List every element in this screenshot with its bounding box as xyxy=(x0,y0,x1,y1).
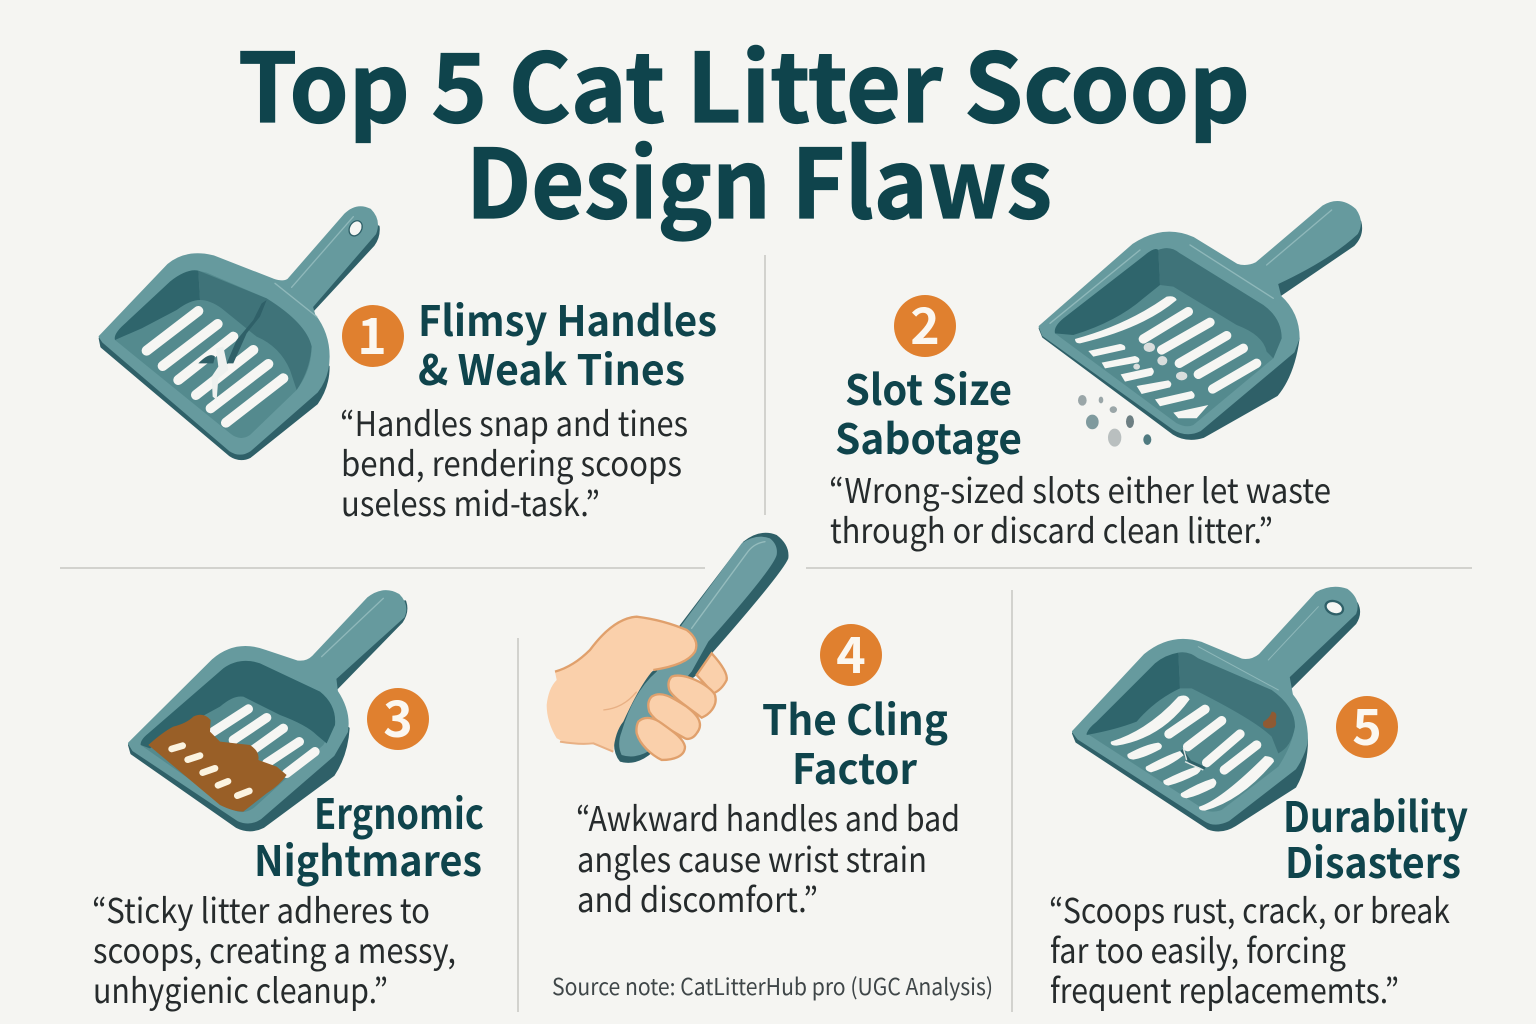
heading: Factor xyxy=(792,736,918,797)
heading: & Weak Tines xyxy=(418,337,685,398)
heading: Durability xyxy=(1283,784,1468,845)
icon: hand gripping scoop handle xyxy=(547,533,788,763)
quote: through or discard clean litter.” xyxy=(830,504,1273,553)
icon: cracked rusty scoop xyxy=(1073,588,1359,830)
badge 3: 3 xyxy=(383,680,413,752)
icon: scoop with stuck litter xyxy=(129,592,406,830)
badge 1: 1 xyxy=(357,297,387,369)
quote: “Sticky litter adheres to xyxy=(92,884,430,933)
heading: Flimsy Handles xyxy=(418,288,717,349)
badge 3 xyxy=(367,680,429,752)
heading xyxy=(835,357,1022,467)
quote: bend, rendering scoops xyxy=(341,437,682,486)
badge 4 xyxy=(820,616,882,688)
icon: scoop with litter falling through slots xyxy=(1040,202,1361,447)
quote: “Scoops rust, crack, or break xyxy=(1049,884,1450,933)
heading xyxy=(762,687,948,797)
title: Top 5 Cat Litter Scoop xyxy=(238,13,1250,150)
icon: scoop with cracked handle xyxy=(100,208,378,459)
quote xyxy=(340,397,688,526)
heading: Slot Size xyxy=(845,357,1012,418)
badge 5: 5 xyxy=(1352,688,1382,760)
heading: Ergnomic xyxy=(314,781,484,842)
quote: scoops, creating a messy, xyxy=(93,924,456,973)
heading xyxy=(418,288,717,398)
quote xyxy=(829,464,1331,553)
panel: flaw 3 ergonomic nightmares xyxy=(92,592,484,1013)
panel: flaw 2 slot size xyxy=(829,202,1361,553)
heading: The Cling xyxy=(762,687,948,748)
quote: angles cause wrist strain xyxy=(577,833,927,882)
heading: Nightmares xyxy=(254,828,482,889)
panel: flaw 4 the cling factor xyxy=(547,533,993,1002)
quote: “Awkward handles and bad xyxy=(576,792,960,841)
panel: flaw 5 durability disasters xyxy=(1049,588,1468,1013)
quote: useless mid-task.” xyxy=(341,477,600,526)
heading: Disasters xyxy=(1285,830,1461,891)
title xyxy=(238,13,1250,246)
quote xyxy=(576,792,960,922)
badge 5 xyxy=(1336,688,1398,760)
quote: “Wrong-sized slots either let waste xyxy=(829,464,1331,513)
quote xyxy=(92,884,456,1013)
badge 4: 4 xyxy=(836,616,866,688)
source note: Source note: CatLitterHub pro (UGC Analysis) xyxy=(552,968,993,1002)
panel: flaw 1 flimsy handles xyxy=(100,208,717,526)
heading: Sabotage xyxy=(835,406,1022,467)
quote: frequent replacememts.” xyxy=(1050,964,1399,1013)
heading xyxy=(1283,784,1468,891)
badge 2: 2 xyxy=(910,287,940,359)
quote: unhygienic cleanup.” xyxy=(93,964,388,1013)
quote: “Handles snap and tines xyxy=(340,397,688,446)
quote xyxy=(1049,884,1450,1013)
heading xyxy=(254,781,484,889)
quote: and discomfort.” xyxy=(577,873,818,922)
badge 1 xyxy=(342,297,404,369)
title: Design Flaws xyxy=(466,109,1052,246)
quote: far too easily, forcing xyxy=(1050,924,1346,973)
badge 2 xyxy=(894,287,956,359)
